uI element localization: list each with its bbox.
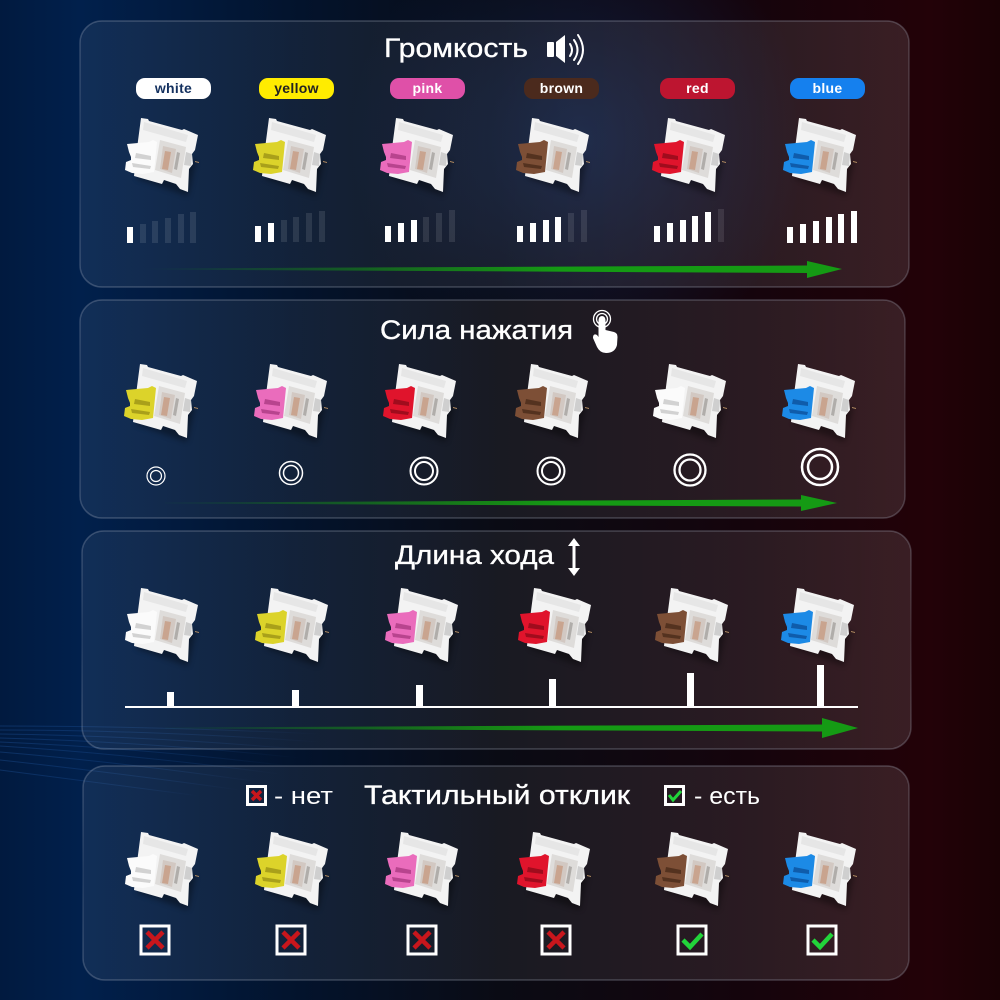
bars: pink level 3 — [385, 210, 455, 242]
switch: yellow — [253, 118, 327, 196]
switch: blue — [783, 832, 857, 910]
arrow — [145, 261, 842, 278]
panel: press force — [80, 300, 905, 518]
cross mark 3 — [408, 926, 436, 954]
heading: travel length: Длина хода — [395, 540, 555, 570]
label: pink — [390, 78, 465, 99]
rings: force 3 — [410, 458, 438, 484]
rings: force 2 — [280, 462, 302, 484]
rings: force 6 — [802, 449, 838, 485]
switch: blue — [783, 118, 857, 196]
panel: travel length — [82, 531, 911, 749]
rings: force 1 — [147, 467, 165, 485]
switch: brown — [516, 118, 590, 196]
bars: yellow level 2 — [255, 211, 325, 242]
switch: white — [125, 118, 199, 196]
switch: yellow — [255, 588, 329, 666]
cross mark 1 — [141, 926, 169, 954]
legend: yes: - есть — [694, 783, 760, 810]
switch: white — [653, 364, 727, 442]
switch: pink — [385, 588, 459, 666]
switch: brown — [515, 364, 589, 442]
switch: red — [517, 832, 591, 910]
panel: volume — [80, 21, 909, 287]
label: pink: pink — [413, 80, 442, 96]
label: white — [136, 78, 211, 99]
switch: red — [652, 118, 726, 196]
icon: up-down arrow — [568, 538, 580, 576]
switch: blue — [782, 364, 856, 442]
switch: yellow — [255, 832, 329, 910]
switch: white — [125, 832, 199, 910]
icon: speaker — [547, 35, 583, 64]
rings: force 5 — [674, 454, 706, 486]
rings: force 4 — [538, 458, 564, 484]
label: brown — [524, 78, 599, 99]
switch: yellow — [124, 364, 198, 442]
label: blue — [790, 78, 865, 99]
check mark 5 — [678, 926, 706, 954]
label: red: red — [686, 80, 709, 96]
icon: pressing hand — [593, 310, 618, 353]
label: yellow: yellow — [274, 80, 319, 96]
switch: pink — [380, 118, 454, 196]
label: brown: brown — [540, 80, 583, 96]
heading: tactile feedback: Тактильный отклик — [364, 780, 630, 810]
cross mark 2 — [277, 926, 305, 954]
switch: pink — [254, 364, 328, 442]
check mark 6 — [808, 926, 836, 954]
cross mark 4 — [542, 926, 570, 954]
panel: tactile feedback — [83, 766, 909, 980]
heading: press force: Сила нажатия — [380, 315, 573, 345]
legend: yes — [666, 783, 760, 810]
bars: red level 5 — [654, 209, 724, 242]
bars: white level 1 — [127, 212, 196, 243]
label: blue: blue — [813, 80, 842, 96]
label: red — [660, 78, 735, 99]
bars: blue level 6 — [787, 211, 857, 243]
switch: brown — [655, 832, 729, 910]
legend: no — [248, 783, 333, 810]
switch: white — [125, 588, 199, 666]
bars: brown level 4 — [517, 210, 587, 242]
legend: no: - нет — [274, 783, 333, 810]
arrow — [165, 718, 858, 738]
switch: brown — [655, 588, 729, 666]
arrow — [165, 495, 837, 511]
travel bars with baseline — [125, 665, 858, 708]
label: yellow — [259, 78, 334, 99]
label: white: white — [154, 80, 192, 96]
switch: blue — [781, 588, 855, 666]
switch: red — [518, 588, 592, 666]
switch: red — [383, 364, 457, 442]
switch: pink — [385, 832, 459, 910]
heading: volume: Громкость — [384, 33, 528, 63]
